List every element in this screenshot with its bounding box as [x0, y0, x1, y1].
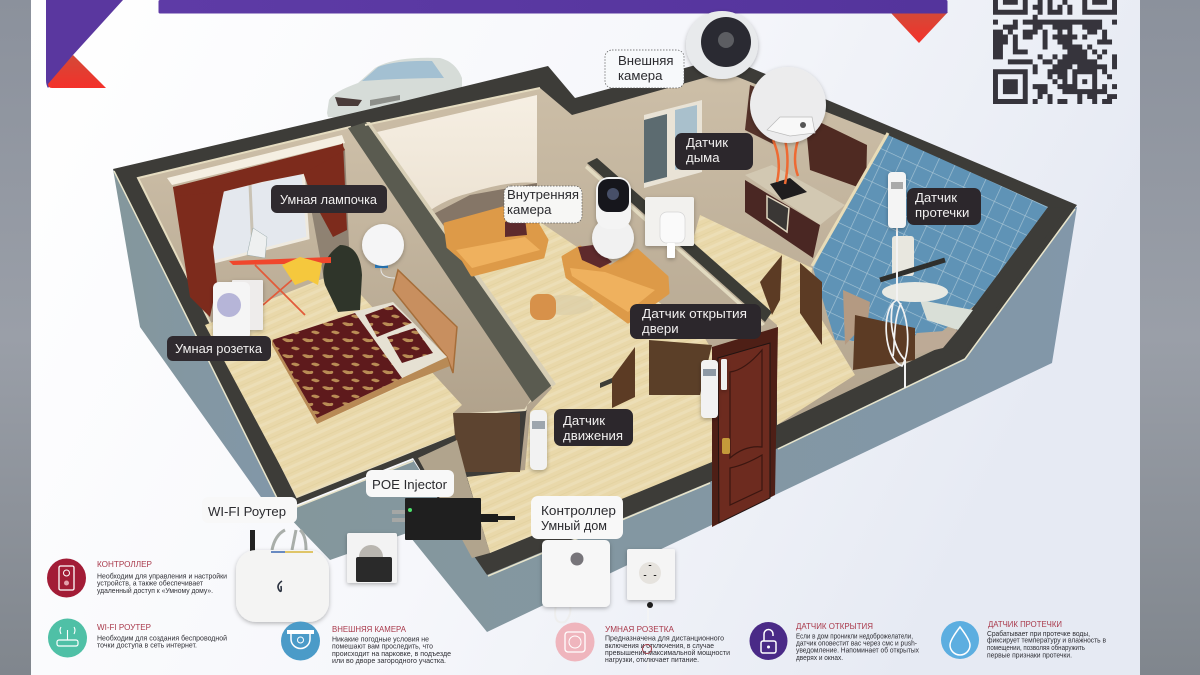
QR code	[993, 0, 1117, 104]
description: удаленный доступ к «Умному дому».	[97, 586, 213, 595]
window glass left	[644, 114, 667, 183]
window glass right	[675, 105, 697, 170]
device: wall socket	[627, 549, 675, 670]
label: door opening	[630, 304, 761, 339]
car windows	[362, 61, 444, 81]
house floor plan	[113, 57, 1077, 632]
small wire glyph	[642, 644, 652, 654]
device: smart socket	[213, 280, 263, 340]
sensor window	[703, 369, 716, 376]
description: датчик оповестит вас через смс и push-	[796, 640, 917, 648]
door frame	[712, 327, 778, 527]
camera body	[596, 177, 631, 229]
legend: smart socket	[556, 622, 730, 664]
plug	[667, 243, 675, 258]
description: Предназначена для дистанционного	[605, 634, 724, 642]
headboard	[393, 270, 457, 373]
description: устройств, а также обеспечивает	[97, 578, 204, 588]
socket ring	[217, 293, 241, 317]
left outer wall	[113, 169, 283, 510]
icon: router	[48, 618, 87, 658]
heading: WI-FI РОУТЕР	[97, 622, 151, 632]
label box	[366, 470, 454, 497]
description: или во дворе загородного участка.	[332, 656, 446, 665]
router body	[236, 550, 329, 622]
label box	[605, 50, 684, 88]
label text: Внешняя	[618, 53, 674, 68]
heading: ВНЕШНЯЯ КАМЕРА	[332, 624, 406, 634]
heading: ДАТЧИК ПРОТЕЧКИ	[988, 619, 1062, 629]
device: motion sensor	[530, 410, 547, 470]
router cables	[272, 530, 306, 550]
description: фиксирует температуру и влажность в	[987, 638, 1106, 644]
bulb wire	[381, 268, 395, 278]
board top	[229, 257, 331, 265]
logo purple shape	[46, 0, 123, 88]
socket pins	[645, 565, 655, 576]
router logo	[278, 581, 282, 591]
door back hall	[649, 340, 712, 395]
bulb base	[375, 263, 388, 268]
detector dots	[800, 122, 806, 128]
upper cabinet left	[745, 85, 775, 145]
label box	[675, 133, 753, 170]
upper cabinet	[805, 115, 867, 190]
cloth	[282, 257, 322, 285]
heading: КОНТРОЛЛЕР	[97, 559, 152, 569]
leak contacts	[891, 182, 903, 189]
smoke lines	[773, 140, 798, 184]
car side	[370, 95, 400, 106]
camera face	[598, 179, 629, 212]
poe cables left	[392, 512, 408, 520]
window frame	[644, 100, 702, 188]
label: indoor camera	[504, 186, 582, 223]
leak body	[888, 172, 906, 228]
device: router	[236, 530, 329, 622]
description: дверях и окнах.	[796, 655, 843, 662]
label: smart bulb	[271, 185, 387, 213]
partition edge	[585, 165, 765, 326]
toilet bowl	[882, 282, 948, 302]
device: controller	[542, 540, 610, 622]
description: включения и отключения, в случае	[605, 641, 714, 650]
poe cables right	[478, 514, 498, 522]
glass top	[537, 295, 593, 315]
controller button	[570, 552, 584, 566]
camera base	[592, 217, 634, 259]
device: dome camera	[686, 11, 758, 79]
legend: door sensor	[750, 621, 920, 662]
stove top	[770, 178, 807, 200]
description: происходит на парковке, в подъезде	[332, 649, 451, 658]
bedroom shadowed wall	[305, 150, 350, 285]
window mullion	[250, 184, 253, 252]
bath tub	[920, 300, 973, 330]
coffee table	[530, 294, 593, 320]
socket holes	[639, 562, 661, 584]
socket wire	[647, 604, 649, 670]
description: первые признаки протечки.	[987, 652, 1072, 660]
living room sofa 1	[445, 208, 547, 275]
label text line 2: дыма	[686, 150, 720, 165]
label box	[531, 496, 623, 539]
plate	[645, 197, 694, 246]
label box	[167, 336, 271, 361]
toilet tank	[892, 236, 914, 276]
wall tops silhouette	[113, 57, 1077, 575]
bathroom	[812, 133, 1066, 358]
label: outdoor camera	[605, 50, 684, 88]
label text line 2: движения	[563, 428, 623, 443]
cream outer edges	[114, 171, 1075, 576]
sensor	[660, 212, 685, 243]
label text: Датчик открытия	[642, 306, 747, 321]
pillow 1	[365, 305, 412, 337]
description: уведомление. Напоминает об открытых	[796, 646, 920, 654]
label: smoke	[675, 133, 753, 170]
icon: drop	[941, 621, 979, 659]
door bath	[853, 315, 915, 370]
iron	[247, 228, 267, 258]
leak coil	[886, 300, 908, 366]
label text: Умная лампочка	[280, 192, 378, 207]
socket body	[213, 282, 250, 340]
interior doors	[453, 255, 915, 472]
detector body	[750, 67, 826, 143]
socket plate	[347, 533, 397, 583]
description: Срабатывает при протечке воды,	[987, 630, 1090, 638]
motion window	[532, 421, 545, 429]
oven	[767, 196, 789, 232]
pillow 2	[387, 328, 433, 363]
label: motion	[554, 409, 633, 446]
description: Если в дом проникли недоброжелатели,	[796, 632, 913, 640]
black plug	[356, 557, 392, 582]
device: POE injector	[392, 498, 515, 540]
sofa seat	[456, 237, 540, 268]
short wall segment	[600, 378, 612, 388]
leak wire	[897, 225, 905, 388]
socket frame	[627, 549, 675, 600]
door panel lower	[730, 455, 762, 505]
right curtain	[303, 143, 347, 237]
description: Необходим для создания беспроводной	[97, 634, 227, 642]
label box	[271, 185, 387, 213]
label text: Датчик	[686, 135, 728, 150]
divider top edge	[365, 88, 540, 125]
wall plate	[232, 280, 263, 330]
label box	[554, 409, 633, 446]
entry door	[712, 327, 778, 527]
legend: controller	[47, 558, 227, 598]
label text line 2: Умный дом	[541, 518, 607, 533]
valance	[173, 144, 345, 196]
label box	[630, 304, 761, 339]
label text: Датчик	[915, 190, 957, 205]
door panel upper	[730, 350, 762, 458]
bathroom edge	[812, 133, 888, 266]
description: Никакие погодные условия не	[332, 634, 429, 644]
poe box	[405, 498, 481, 540]
label: leak	[907, 188, 981, 225]
label: controller	[531, 496, 623, 539]
poe led	[408, 508, 412, 512]
label: router	[202, 497, 297, 523]
device: bulb	[362, 224, 404, 278]
corridor wall	[418, 440, 490, 558]
device: smoke detector	[750, 67, 826, 143]
lens highlight	[718, 32, 734, 48]
bedroom floor	[205, 272, 462, 497]
door corridor	[612, 347, 635, 408]
description: превышения максимальной мощности	[605, 648, 730, 657]
door hall	[760, 255, 782, 315]
tiled walls	[812, 135, 1048, 345]
sofa pillow	[578, 245, 612, 268]
partition wall	[587, 158, 772, 322]
label box	[504, 186, 582, 223]
router ports	[271, 551, 285, 553]
device: door sensor	[701, 359, 727, 418]
motion body	[530, 410, 547, 470]
label: POE injector	[366, 470, 454, 497]
left curtain	[173, 177, 227, 317]
icon: lock	[750, 622, 788, 660]
sofa shape	[445, 208, 547, 275]
label text line 2: двери	[642, 321, 679, 336]
bedroom room	[138, 127, 535, 497]
socket round	[359, 545, 383, 569]
kitchen window	[644, 100, 702, 188]
car	[327, 58, 462, 118]
wall below curtains	[418, 183, 537, 232]
door bath left	[800, 263, 822, 345]
description: точки доступа в сеть интернет.	[97, 640, 197, 650]
living room curtains	[377, 95, 537, 220]
controller wire	[555, 605, 570, 622]
top purple banner	[158, 0, 948, 43]
sensor body	[701, 360, 718, 418]
sofa pillow	[505, 218, 527, 237]
divider wall	[348, 122, 552, 402]
door bedroom	[453, 413, 520, 472]
hall and kitchen floor	[690, 215, 855, 425]
short wall dark	[418, 435, 456, 456]
label text line 2: камера	[618, 68, 663, 83]
label text: POE Injector	[372, 477, 448, 492]
bath partition	[843, 290, 870, 345]
legend: outdoor camera	[281, 622, 451, 665]
bedspread	[272, 313, 402, 418]
sofa seat	[570, 268, 655, 312]
living and corridor floor	[443, 212, 712, 553]
ironing board	[229, 228, 331, 315]
logo	[46, 0, 123, 88]
car grille	[335, 97, 362, 106]
label text: Контроллер	[541, 503, 616, 518]
window glass	[210, 172, 308, 263]
detector grille	[767, 117, 815, 136]
plant	[323, 245, 362, 312]
description: помещении, позволяя обнаружить	[987, 644, 1085, 652]
heading: УМНАЯ РОЗЕТКА	[605, 624, 674, 634]
logo red triangle	[48, 55, 106, 88]
description: помешают вам проследить, что	[332, 642, 433, 650]
legend: router	[48, 618, 227, 658]
controller body	[542, 540, 610, 607]
kitchen	[745, 85, 867, 258]
label: smart socket	[167, 336, 271, 361]
bathroom dark wall	[945, 207, 1066, 357]
window	[210, 172, 308, 263]
camera lens	[607, 188, 619, 200]
legs	[255, 265, 305, 315]
label text: Датчик	[563, 413, 605, 428]
device: wall plate sensor	[645, 197, 694, 258]
car body	[327, 58, 462, 118]
label box	[202, 497, 297, 523]
heading: ДАТЧИК ОТКРЫТИЯ	[796, 621, 873, 631]
curtains	[173, 143, 347, 317]
label text line 2: протечки	[915, 205, 969, 220]
poe cable thin	[498, 516, 515, 520]
door handle	[722, 438, 730, 454]
router ports yellow	[285, 551, 313, 553]
sheet	[353, 302, 447, 378]
icon: controller	[47, 558, 86, 598]
camera lens dome	[701, 17, 751, 67]
label text line 2: камера	[507, 202, 552, 217]
label box	[907, 188, 981, 225]
interior living, kitchen, hall	[365, 72, 1048, 553]
bath bar	[880, 260, 945, 280]
description: Необходим для управления и настройки	[97, 572, 227, 580]
label text: WI-FI Роутер	[208, 504, 286, 519]
icon: socket	[556, 622, 594, 662]
device: indoor camera	[592, 177, 634, 259]
bathroom floor	[900, 330, 958, 358]
cornice	[167, 135, 345, 185]
socket plug	[647, 602, 653, 608]
divider highlight	[366, 122, 556, 387]
living room sofa 2	[563, 245, 668, 322]
sofa shape	[563, 247, 668, 322]
lower outer wall	[284, 207, 1077, 632]
legend: leak sensor	[941, 619, 1106, 660]
description: нагрузки, отключает питание.	[605, 655, 699, 664]
router antenna	[250, 530, 255, 552]
bulb globe	[362, 224, 404, 266]
pouf	[530, 294, 556, 320]
camera housing	[686, 11, 758, 79]
bed base	[272, 340, 450, 424]
label text: Умная розетка	[175, 341, 263, 356]
door leaf	[718, 343, 770, 523]
icon: camera	[281, 622, 320, 660]
magnet strip	[721, 359, 727, 390]
device: plug socket	[347, 533, 397, 583]
banner red corner	[890, 12, 948, 43]
counter	[745, 165, 845, 225]
banner bar	[158, 0, 948, 14]
bed	[272, 270, 457, 424]
device: leak sensor	[886, 172, 908, 388]
label text: Внутренняя	[507, 187, 579, 202]
base cabinets	[745, 180, 820, 258]
